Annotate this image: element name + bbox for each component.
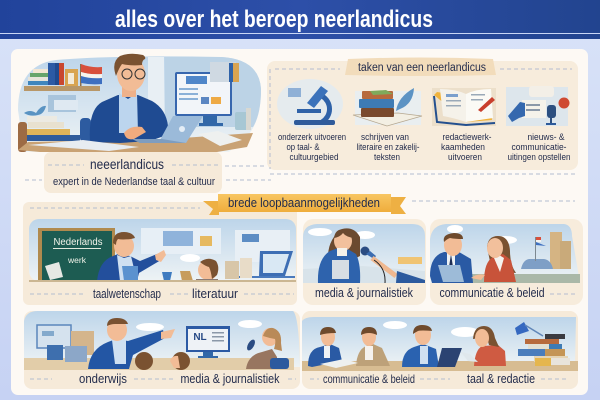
panel: communicatie en redactie: taal & redactie xyxy=(467,372,535,386)
student xyxy=(162,259,218,281)
task 2 text: literaire en zakelij- xyxy=(356,142,420,152)
chalkboard xyxy=(38,228,115,281)
task 2 text: teksten xyxy=(374,152,400,162)
task 1 text: onderzerk uitvoeren xyxy=(278,132,346,142)
panel: taalwetenschap en literatuur: literatuur xyxy=(192,287,238,301)
task 1 text xyxy=(278,132,346,162)
task 3 text: uitvoeren xyxy=(448,152,482,162)
panel: media en journalistiek: media & journalistiek xyxy=(315,286,414,300)
building and flag xyxy=(521,232,571,269)
man with laptop xyxy=(430,233,473,283)
reporter woman xyxy=(318,228,360,283)
panel: communicatie en redactie: communicatie & beleid xyxy=(323,372,415,386)
panel: taalwetenschap en literatuur xyxy=(23,202,297,305)
task 1: microscope xyxy=(277,79,346,162)
heading banner: brede loopbaanmogelijkheden: brede loopbaanmogelijkheden xyxy=(228,196,380,210)
title: alles over het beroep neerlandicus xyxy=(115,6,433,33)
monitor xyxy=(176,73,231,126)
lamp and book stack xyxy=(515,322,570,366)
panel: media en journalistiek xyxy=(303,219,426,305)
panel heading xyxy=(345,58,496,76)
frames and stacked books xyxy=(18,95,80,152)
heading banner: brede loopbaanmogelijkheden xyxy=(30,194,575,215)
two men at table xyxy=(308,327,390,368)
panel: onderwijs en media: media & journalistiek xyxy=(180,372,280,386)
task 2: books and quill xyxy=(353,88,422,162)
header banner xyxy=(0,0,600,39)
panel: taalwetenschap en literatuur: taalwetenschap xyxy=(93,287,161,301)
panel: onderwijs en media: onderwijs xyxy=(79,372,127,386)
task 3: open book xyxy=(432,88,496,162)
task 3 text: redactiewerk- xyxy=(442,132,492,142)
task 2 text: schrijven van xyxy=(361,132,409,142)
laptop xyxy=(225,251,295,279)
panel heading: taken van een neerlandicus xyxy=(358,62,486,74)
shelf with books and flag xyxy=(24,63,102,91)
chalkboard: werk xyxy=(67,255,87,265)
task 4 text: communicatie- xyxy=(512,142,566,152)
task 4 text xyxy=(508,132,570,162)
task 4: megaphone and mic xyxy=(506,86,570,162)
NL monitor: NL xyxy=(193,332,207,343)
students xyxy=(135,352,190,370)
panel: communicatie en redactie xyxy=(302,311,578,389)
laptop xyxy=(132,116,203,143)
NL monitor xyxy=(186,326,230,358)
hero illustration xyxy=(18,54,261,152)
panel: communicatie en beleid xyxy=(430,219,583,305)
title box: neerlandicus: neeerlandicus xyxy=(90,157,164,172)
task 2 text xyxy=(356,132,420,162)
title box: neerlandicus: expert in de Nederlandse taal & cultuur xyxy=(53,176,215,188)
woman reading xyxy=(461,326,506,366)
microphone and arm xyxy=(360,246,425,283)
task 4 text: uitingen opstellen xyxy=(508,152,570,162)
task 1 text: cultuurgebied xyxy=(290,152,338,162)
title box: neerlandicus xyxy=(25,152,271,193)
task 1 text: op taal- & xyxy=(286,142,320,152)
man at laptop xyxy=(402,325,462,367)
task 3 text: kaamheden xyxy=(441,142,485,152)
woman xyxy=(471,236,516,282)
panel: communicatie en beleid: communicatie & beleid xyxy=(440,286,545,300)
task 3 text xyxy=(441,132,492,162)
task 4 text: nieuws- & xyxy=(528,132,564,142)
teacher pointing xyxy=(88,318,175,369)
monitors xyxy=(37,325,94,362)
panel: taken xyxy=(267,58,578,174)
desk xyxy=(18,133,253,152)
teacher xyxy=(97,232,166,281)
interviewer woman xyxy=(245,328,289,369)
panel: onderwijs en media xyxy=(24,311,300,389)
chalkboard: Nederlands xyxy=(54,237,102,248)
person: neerlandicus xyxy=(80,54,168,143)
